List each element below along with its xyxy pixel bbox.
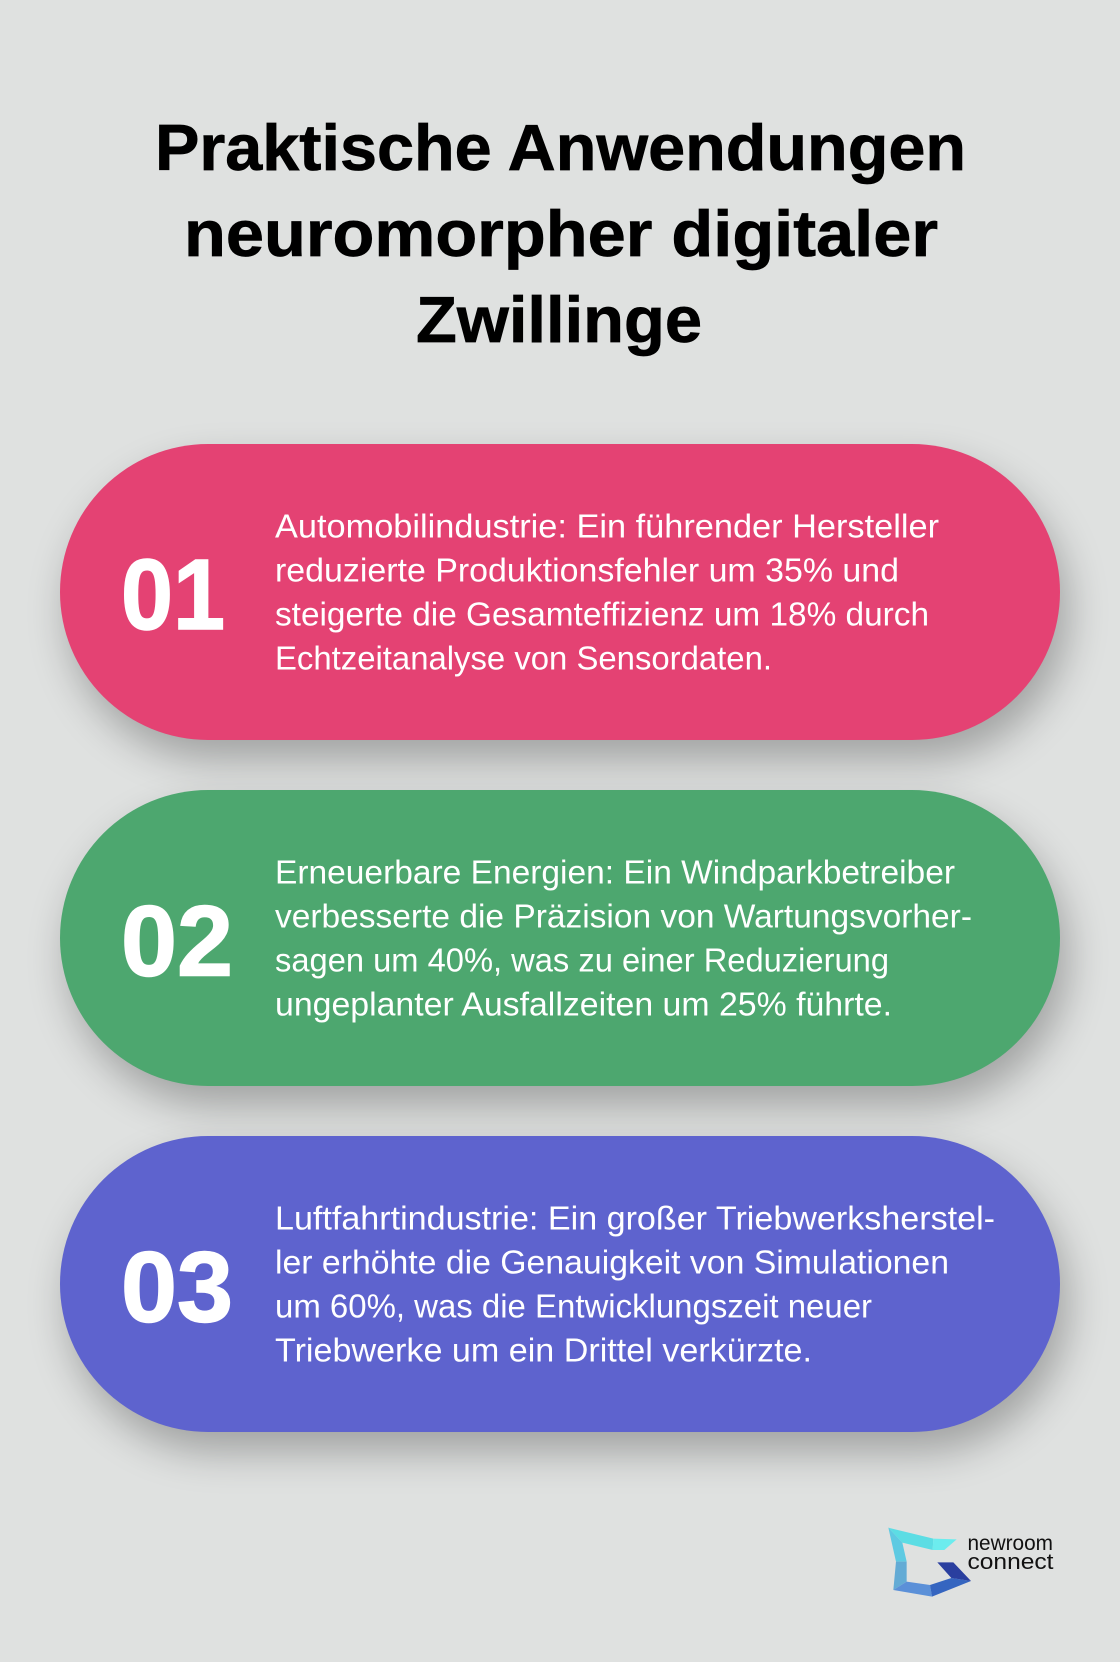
icon: logo mark <box>888 1528 971 1597</box>
text block: Automobilindustrie <box>275 508 939 676</box>
text block: Luftfahrtindustrie: um 60%, was die Entwicklungszeit neuer <box>275 1288 872 1324</box>
text block: Erneuerbare Energien: Erneuerbare Energien: Ein Windparkbetreiber <box>275 854 955 890</box>
text block: Erneuerbare Energien <box>275 854 972 1022</box>
text block: Erneuerbare Energien: ungeplanter Ausfallzeiten um 25% führte. <box>275 986 892 1022</box>
text block: Luftfahrtindustrie: Luftfahrtindustrie: Ein großer Triebwerksherstel- <box>275 1200 995 1236</box>
logo: newroom connect <box>888 1528 1054 1597</box>
title: Zwillinge <box>416 283 702 356</box>
panel: Automobilindustrie <box>60 444 1060 740</box>
logo wordmark <box>968 1532 1054 1574</box>
text block: Automobilindustrie: Echtzeitanalyse von Sensordaten. <box>275 639 772 676</box>
logo wordmark: newroom <box>968 1532 1053 1555</box>
text block: Automobilindustrie: Automobilindustrie: Ein führender Hersteller <box>275 508 939 545</box>
text block: Erneuerbare Energien: sagen um 40%, was zu einer Reduzierung <box>275 942 889 978</box>
logo wordmark: connect <box>968 1549 1054 1574</box>
text block: Luftfahrtindustrie: Triebwerke um ein Drittel verkürzte. <box>275 1332 812 1368</box>
title: neuromorpher digitaler <box>184 197 938 270</box>
text block: Erneuerbare Energien: verbesserte die Präzision von Wartungsvorher- <box>275 898 972 934</box>
number 01: 01 <box>121 539 225 651</box>
title <box>155 111 966 356</box>
text block: Luftfahrtindustrie <box>275 1200 995 1368</box>
panel: Erneuerbare Energien <box>60 790 1060 1086</box>
text block: Luftfahrtindustrie: ler erhöhte die Genauigkeit von Simulationen <box>275 1244 949 1280</box>
number 03: 03 <box>121 1231 233 1343</box>
text block: Automobilindustrie: reduzierte Produktionsfehler um 35% und <box>275 552 899 589</box>
panel: Luftfahrtindustrie <box>60 1136 1060 1432</box>
number 02: 02 <box>121 885 233 997</box>
text block: Automobilindustrie: steigerte die Gesamteffizienz um 18% durch <box>275 595 929 632</box>
title: Praktische Anwendungen <box>155 111 966 184</box>
